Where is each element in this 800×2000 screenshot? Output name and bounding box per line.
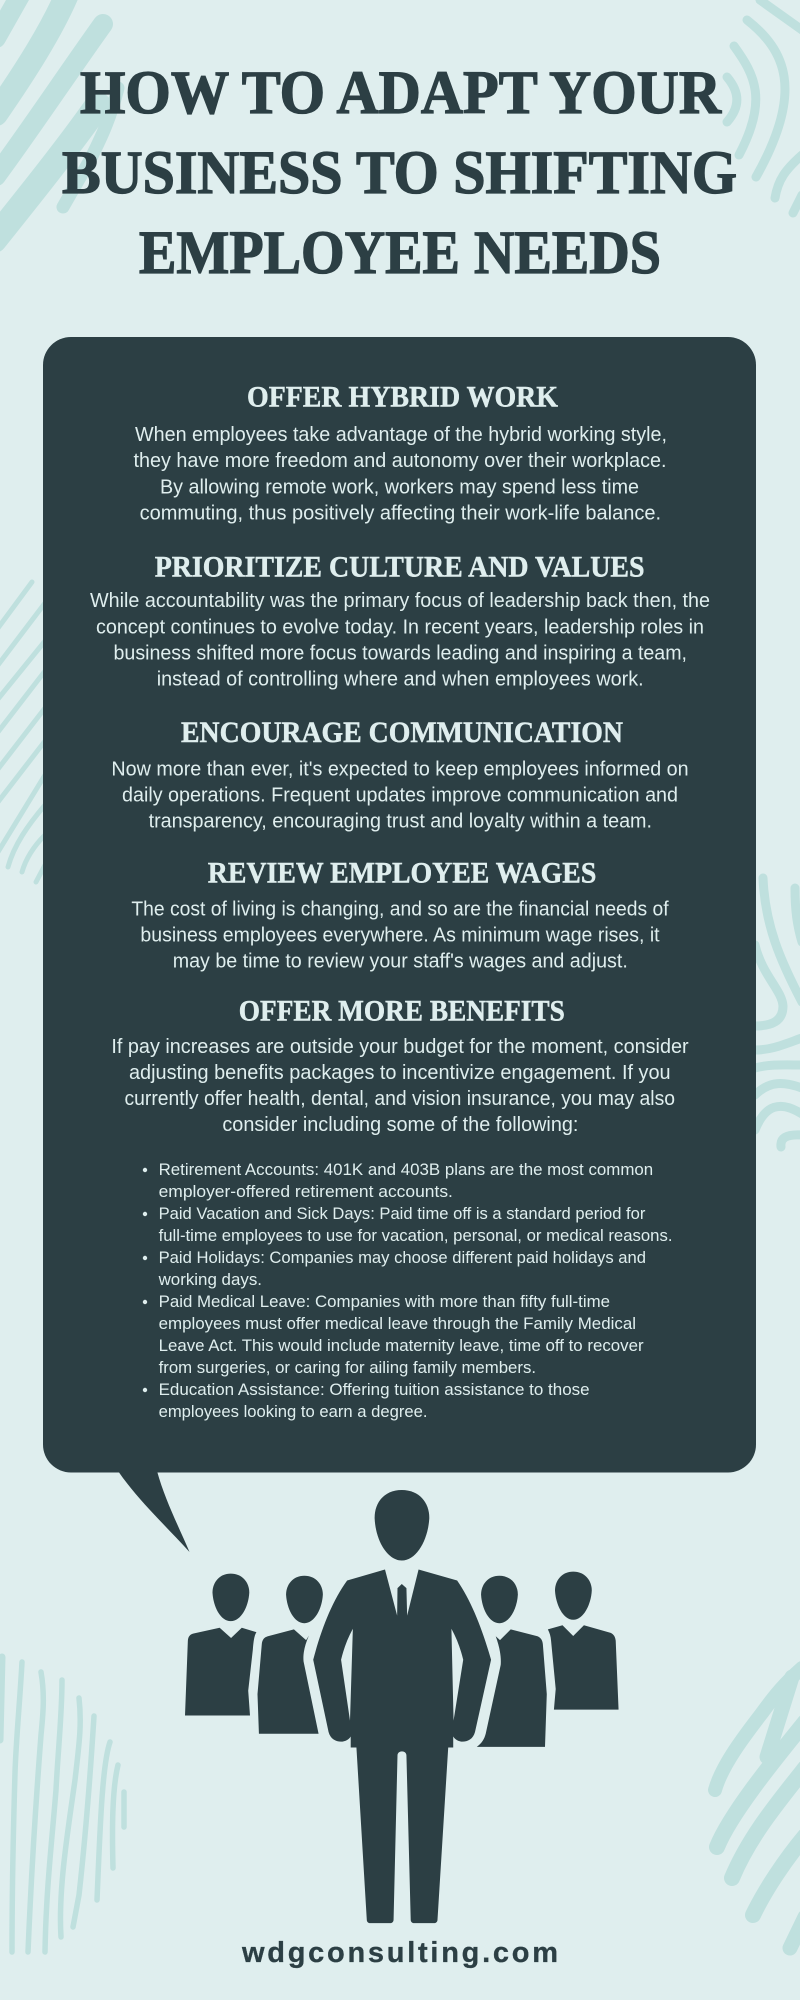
section: encourage communication [111, 716, 689, 832]
decoration: left-middle diagonal lines [0, 582, 45, 882]
section: encourage communication: transparency, encouraging trust and loyalty within a team. [149, 810, 652, 832]
section: prioritize culture and values: PRIORITIZE CULTURE AND VALUES [155, 551, 644, 584]
benefits list: Paid Holidays: Companies may choose different paid holidays and [159, 1249, 646, 1267]
section: offer more benefits: currently offer health, dental, and vision insurance, you may also [124, 1088, 675, 1110]
section: offer hybrid work: commuting, thus positively affecting their work-life balance. [140, 502, 661, 524]
decoration: top-right curved lines [727, 0, 800, 213]
section: offer hybrid work: they have more freedom and autonomy over their workplace. [134, 450, 666, 472]
section: encourage communication: daily operations. Frequent updates improve communication and [122, 784, 678, 806]
section: offer hybrid work: When employees take advantage of the hybrid working style, [135, 424, 667, 446]
section: offer more benefits: OFFER MORE BENEFITS [239, 995, 565, 1028]
section: review employee wages: business employees everywhere. As minimum wage rises, it [140, 924, 660, 946]
section: offer hybrid work: By allowing remote work, workers may spend less time [160, 476, 639, 498]
title: EMPLOYEE NEEDS [139, 220, 661, 287]
section: offer more benefits [111, 995, 689, 1136]
panel: speech bubble [43, 337, 756, 1552]
back person far left [185, 1574, 256, 1716]
section: review employee wages: may be time to review your staff's wages and adjust. [173, 950, 628, 972]
section: prioritize culture and values: While accountability was the primary focus of leadership back then, the [90, 590, 710, 612]
benefits list [143, 1161, 673, 1421]
title [62, 60, 737, 287]
decoration: bottom-left vertical lines [0, 1657, 124, 1952]
footer url: wdgconsulting.com [241, 1937, 558, 1969]
benefits list: full-time employees to use for vacation, personal, or medical reasons. [159, 1227, 673, 1245]
section: offer more benefits: If pay increases are outside your budget for the moment, consider [111, 1036, 689, 1058]
benefits list: employees must offer medical leave through the Family Medical [159, 1315, 636, 1333]
section: offer hybrid work [134, 381, 667, 524]
benefits list: employer-offered retirement accounts. [159, 1183, 453, 1201]
section: prioritize culture and values: instead of controlling where and when employees work. [157, 668, 644, 690]
section: encourage communication: Now more than ever, it's expected to keep employees informed on [111, 758, 689, 780]
section: offer more benefits: consider including some of the following: [222, 1114, 578, 1136]
benefits list: from surgeries, or caring for ailing family members. [159, 1359, 536, 1377]
back person right [477, 1576, 547, 1747]
icon: group of business people [185, 1490, 619, 1923]
benefits list: working days. [158, 1271, 262, 1289]
benefits list: Retirement Accounts: 401K and 403B plans are the most common [159, 1161, 653, 1179]
benefits list: Leave Act. This would include maternity leave, time off to recover [159, 1337, 644, 1355]
section: prioritize culture and values: business shifted more focus towards leading and inspiring a team, [114, 642, 687, 664]
benefits list: employees looking to earn a degree. [159, 1403, 428, 1421]
decoration: top-left scribble [0, 0, 118, 240]
section: review employee wages [131, 856, 669, 972]
section: encourage communication: ENCOURAGE COMMUNICATION [181, 716, 623, 749]
section: offer hybrid work: OFFER HYBRID WORK [247, 381, 559, 414]
front person [313, 1490, 491, 1923]
back person left [257, 1576, 323, 1734]
benefits list: Paid Vacation and Sick Days: Paid time off is a standard period for [159, 1205, 646, 1223]
title: BUSINESS TO SHIFTING [62, 140, 737, 207]
decoration: bottom-right scribble [715, 1668, 800, 1948]
section: review employee wages: The cost of living is changing, and so are the financial needs of [131, 898, 669, 920]
title: HOW TO ADAPT YOUR [80, 60, 722, 127]
benefits list: Paid Medical Leave: Companies with more than fifty full-time [159, 1293, 610, 1311]
section: prioritize culture and values [90, 551, 710, 690]
section: prioritize culture and values: concept continues to evolve today. In recent years, leadership roles in [96, 616, 704, 638]
section: review employee wages: REVIEW EMPLOYEE WAGES [208, 856, 596, 889]
decoration: right-middle wavy lines [755, 878, 800, 1147]
benefits list: Education Assistance: Offering tuition assistance to those [159, 1381, 590, 1399]
back person far right [548, 1572, 619, 1710]
section: offer more benefits: adjusting benefits packages to incentivize engagement. If you [129, 1062, 671, 1084]
